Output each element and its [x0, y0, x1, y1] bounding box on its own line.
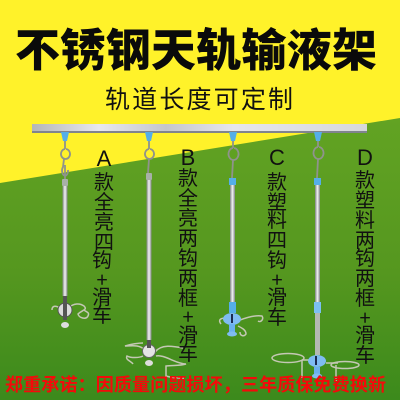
label D: 钩	[355, 242, 375, 271]
label D: 塑	[355, 184, 375, 213]
label B: 两	[178, 262, 198, 291]
label D: D	[357, 145, 373, 170]
label D: 滑	[355, 319, 375, 348]
label B: 滑	[178, 319, 198, 348]
label B: 钩	[178, 242, 198, 271]
label B: B	[181, 145, 195, 170]
label C: C	[269, 145, 285, 170]
label A: 四	[94, 226, 114, 255]
product D: plastic two-hook two-basket stand	[272, 132, 359, 381]
label D: 车	[355, 339, 375, 368]
label C: 料	[267, 204, 287, 233]
label A	[92, 146, 114, 328]
label D: 料	[355, 204, 375, 233]
title: 不锈钢天轨输液架	[15, 14, 377, 79]
label C: 塑	[267, 186, 287, 215]
product A: four-hook stand	[52, 132, 89, 328]
label B	[178, 145, 198, 366]
label B: 款	[178, 162, 198, 191]
label B: 框	[178, 282, 198, 311]
label C: 钩	[267, 244, 287, 273]
label A: A	[97, 146, 112, 171]
label D: 两	[355, 262, 375, 291]
label B: 两	[178, 222, 198, 251]
label D: 款	[355, 164, 375, 193]
label C: 款	[267, 166, 287, 195]
label A: 亮	[94, 206, 114, 235]
label C: +	[271, 264, 283, 293]
label C: 车	[267, 301, 287, 330]
warranty promise: 郑重承诺：因质量问题损坏，三年质保免费换新	[5, 371, 386, 397]
ceiling rail	[32, 124, 367, 133]
label A: 车	[92, 299, 112, 328]
label D	[355, 145, 375, 368]
label D: 框	[355, 282, 375, 311]
subtitle: 轨道长度可定制	[105, 80, 293, 116]
label D: +	[359, 302, 371, 331]
label B: +	[182, 301, 194, 330]
green background panel	[0, 118, 400, 400]
label B: 车	[178, 337, 198, 366]
label C	[267, 145, 287, 330]
label D: 两	[355, 224, 375, 253]
label B: 全	[178, 182, 198, 211]
label C: 滑	[267, 281, 287, 310]
label B: 亮	[178, 202, 198, 231]
label A: 全	[94, 186, 114, 215]
label C: 四	[267, 224, 287, 253]
label A: 滑	[92, 281, 112, 310]
label A: +	[96, 264, 108, 293]
label A: 款	[94, 166, 114, 195]
product C: plastic four-hook stand	[220, 132, 263, 336]
label A: 钩	[92, 244, 112, 273]
product B: four-hook two-basket chrome stand	[125, 132, 186, 378]
